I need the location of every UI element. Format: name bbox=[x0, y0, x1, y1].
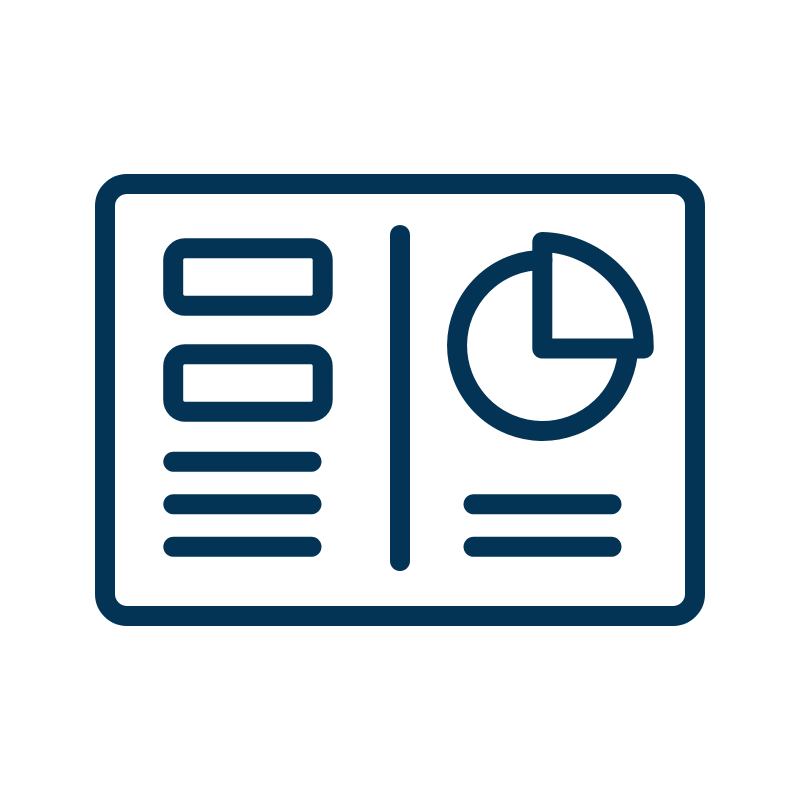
outer frame bbox=[105, 184, 695, 616]
left text lines bbox=[173, 462, 312, 547]
right text lines bbox=[474, 504, 612, 547]
left box 2 bbox=[173, 354, 323, 412]
left box 1 bbox=[173, 248, 323, 306]
vertical divider bbox=[390, 235, 410, 561]
pie chart body bbox=[457, 260, 628, 431]
pie chart slice bbox=[542, 242, 644, 348]
